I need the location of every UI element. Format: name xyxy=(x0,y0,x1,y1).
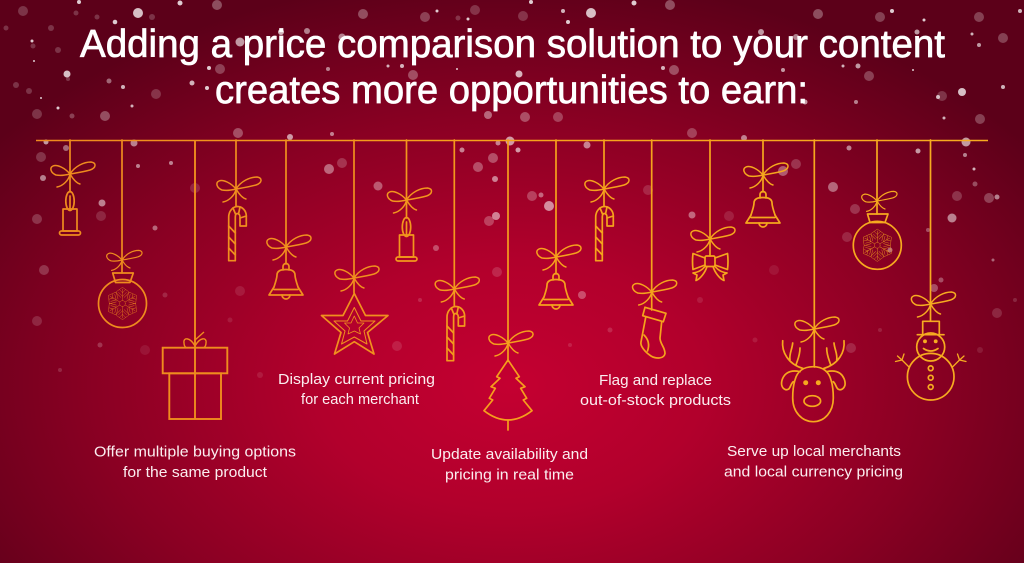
ornament: gift box xyxy=(163,140,227,419)
ornament: candy cane 2 xyxy=(435,140,479,361)
label: real-time availability: pricing in real time xyxy=(445,466,574,484)
ornament: snowflake bauble 1 xyxy=(98,140,146,328)
hanging line xyxy=(36,140,988,142)
label: current pricing: Display current pricing xyxy=(278,371,435,388)
label: current pricing xyxy=(278,371,435,408)
label: out-of-stock: out-of-stock products xyxy=(580,392,731,409)
ornament: candy cane 3 xyxy=(585,140,629,261)
label: buying options: for the same product xyxy=(123,464,268,481)
title xyxy=(80,23,945,112)
title: Adding a price comparison solution to your content xyxy=(80,23,945,66)
ornament: bell 3 xyxy=(744,140,788,227)
label: buying options: Offer multiple buying options xyxy=(94,444,296,460)
label: local merchants: Serve up local merchants xyxy=(727,443,901,460)
label: out-of-stock xyxy=(580,372,731,409)
ornament: bell 2 xyxy=(537,140,581,309)
label: real-time availability: Update availability and xyxy=(431,446,588,463)
ornament: star xyxy=(322,140,388,354)
label: current pricing: for each merchant xyxy=(301,391,420,408)
ornament: candle 2 xyxy=(387,140,432,261)
label: local merchants: and local currency pricing xyxy=(724,464,903,480)
ornament: christmas tree xyxy=(484,140,533,430)
ornament: snowman xyxy=(896,140,966,400)
ornament: snowflake bauble 2 xyxy=(853,140,901,269)
ornament: stocking xyxy=(633,140,677,358)
label: real-time availability xyxy=(431,446,588,484)
ornament: candy cane 1 xyxy=(217,140,261,261)
ornament: bell 1 xyxy=(267,140,311,299)
label: local merchants xyxy=(724,443,903,480)
falling snow xyxy=(4,0,1022,378)
ornament: candle 1 xyxy=(51,140,95,235)
ornament: ribbon bow xyxy=(691,140,735,280)
ornament: reindeer xyxy=(782,140,845,422)
label: buying options xyxy=(94,444,296,481)
label: out-of-stock: Flag and replace xyxy=(599,372,712,389)
title: creates more opportunities to earn: xyxy=(215,69,808,112)
